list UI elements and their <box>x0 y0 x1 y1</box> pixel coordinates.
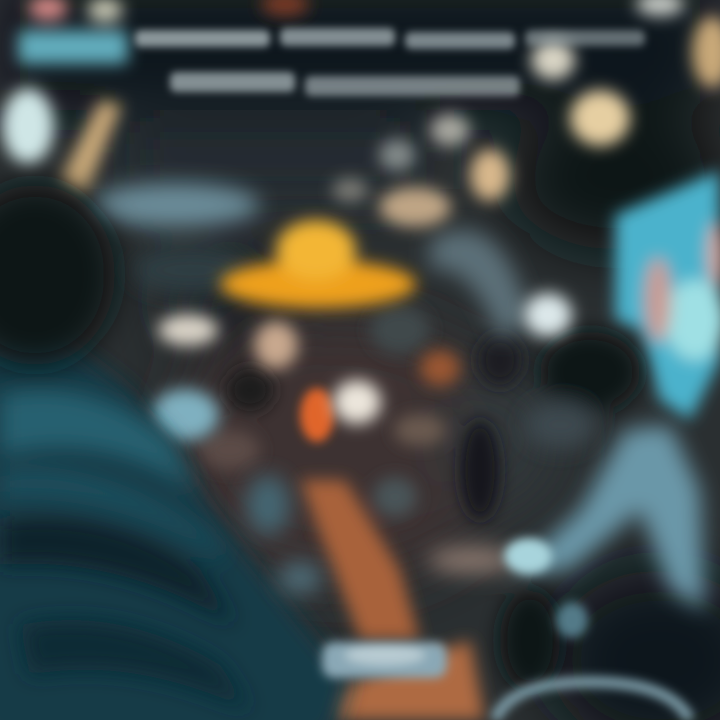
foreground hands and sleeve <box>322 642 447 678</box>
grey band behind hat <box>90 183 530 340</box>
yellow hat <box>220 220 416 308</box>
top-left signs <box>2 0 309 195</box>
crowd texture <box>200 306 522 520</box>
right person <box>428 332 705 690</box>
string of lights <box>332 0 720 227</box>
orange central figure <box>300 350 485 720</box>
arc at bottom right <box>495 682 690 720</box>
white highlights <box>151 293 572 441</box>
left foreground person <box>0 185 350 720</box>
blurred title, illegible in the reference <box>135 28 645 96</box>
cyan panel at right <box>615 170 720 420</box>
